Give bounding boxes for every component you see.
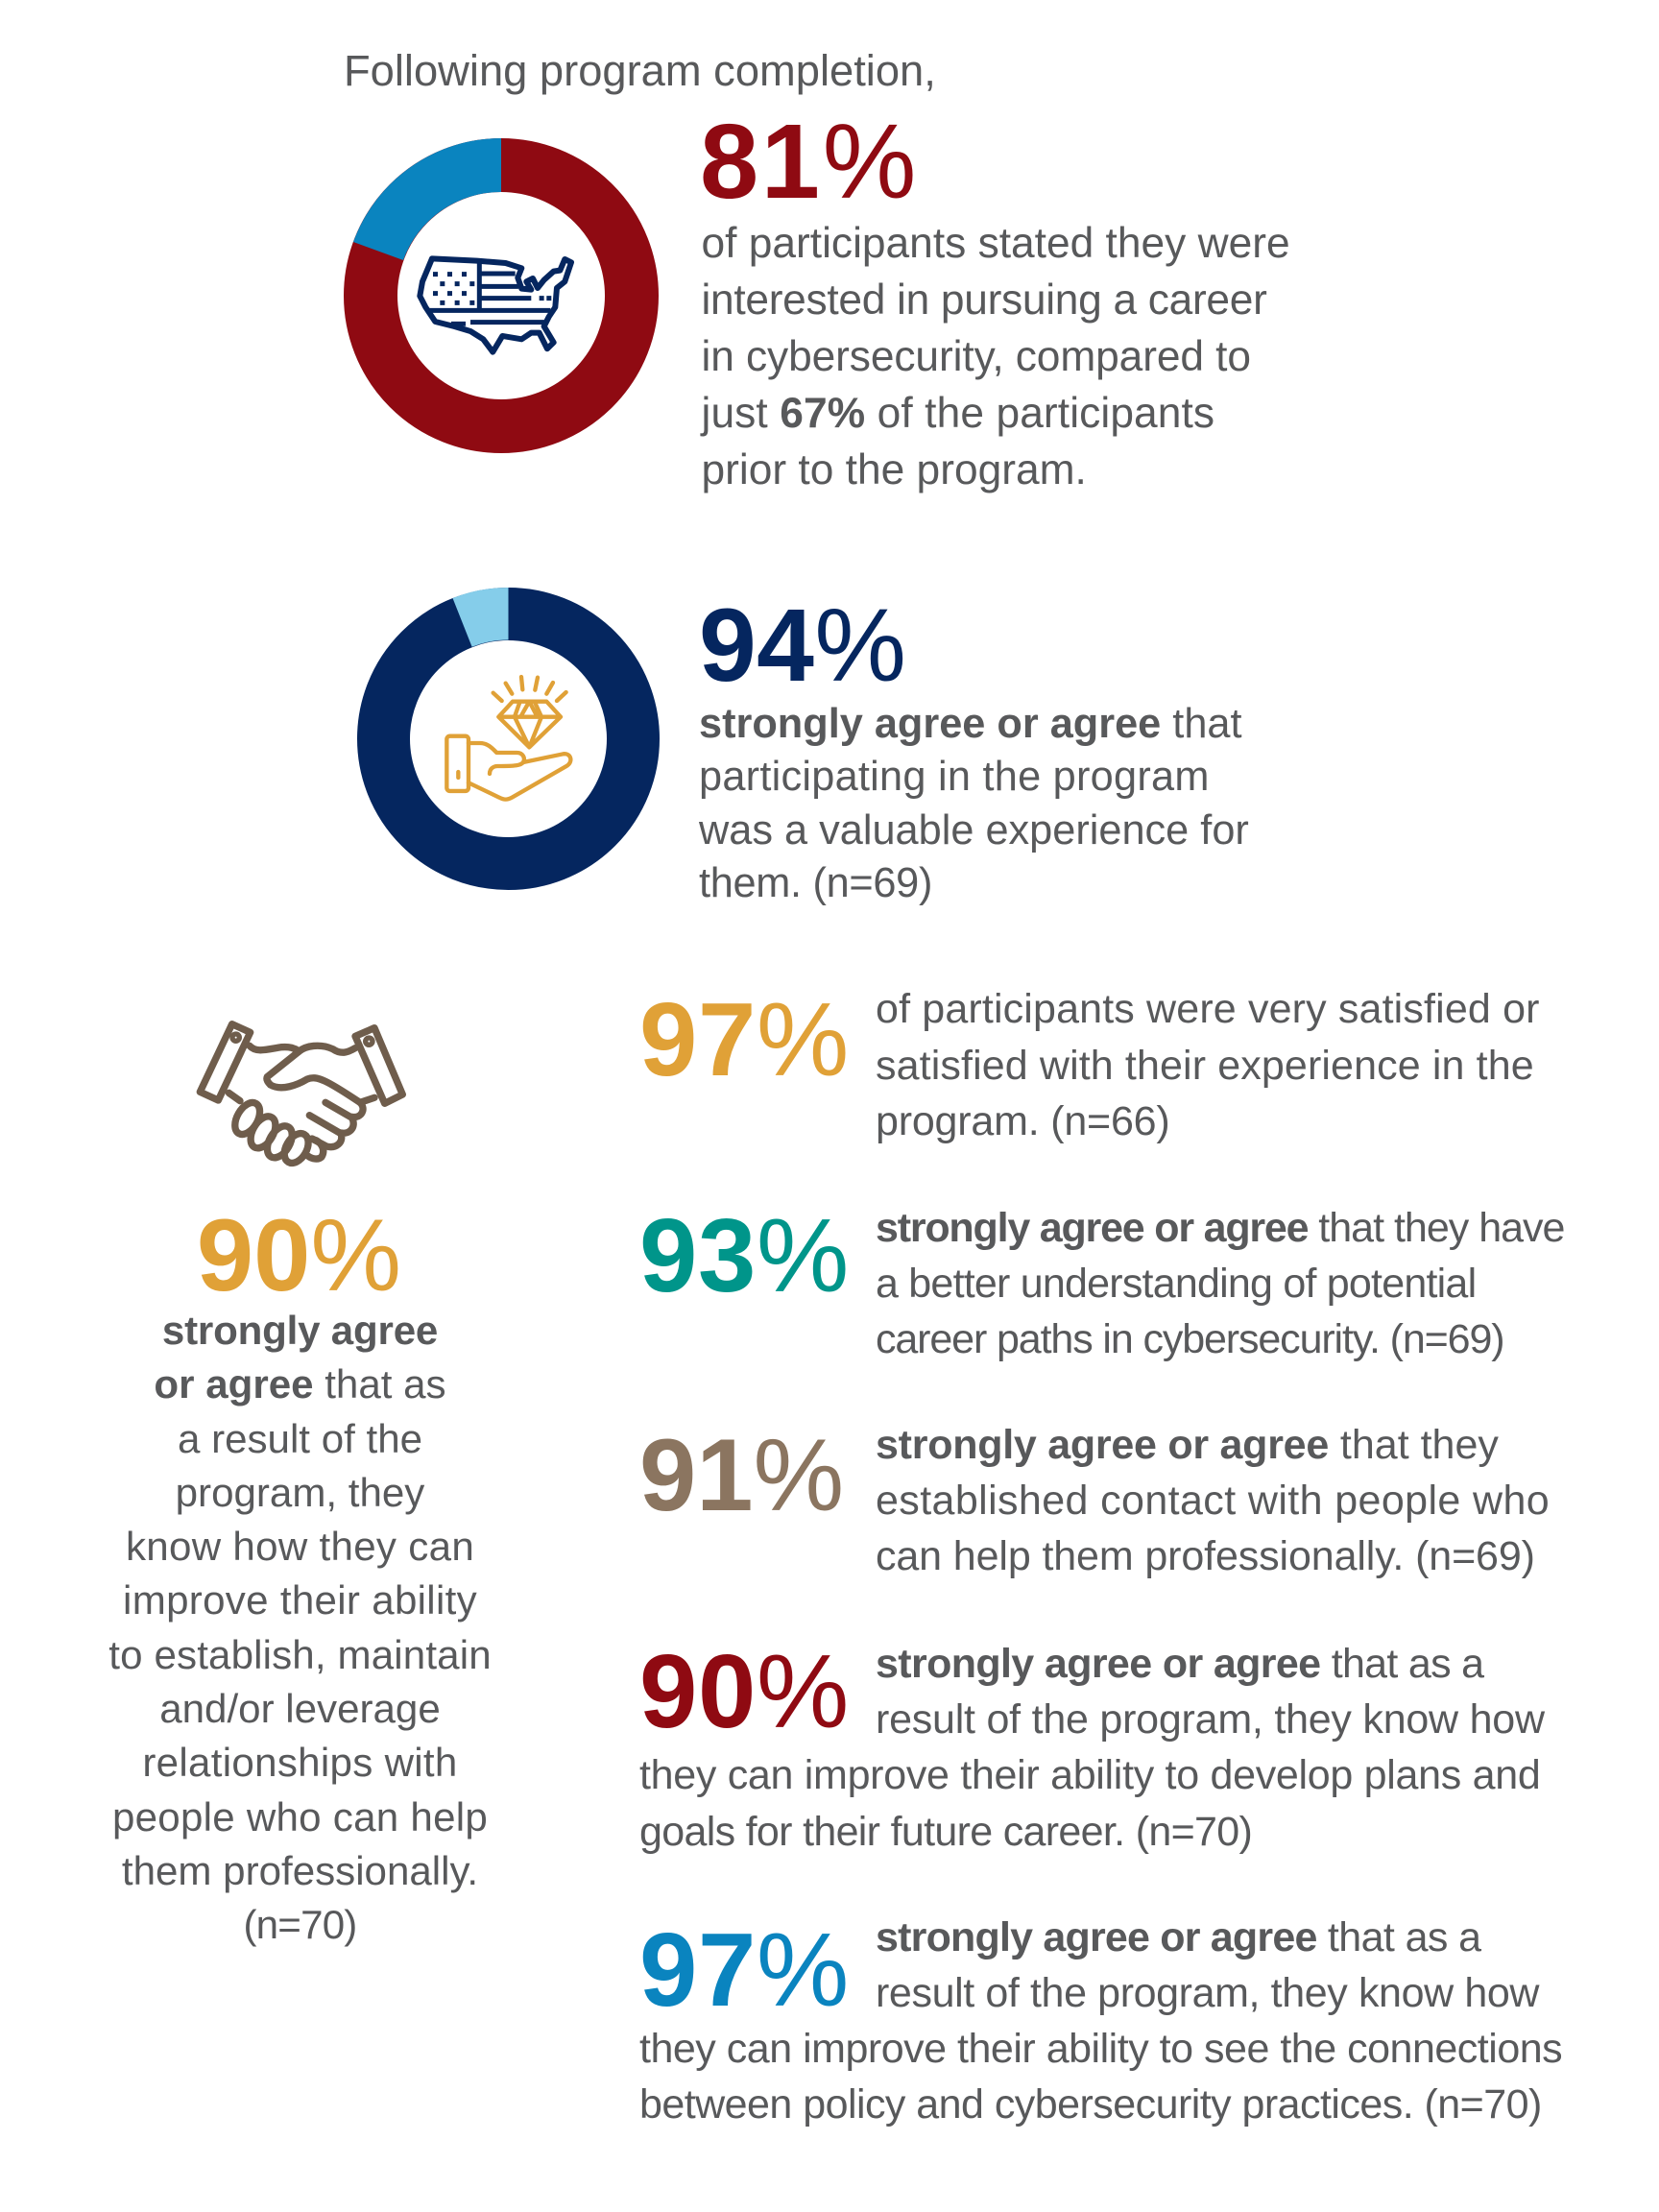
stat: 91%: 91% [639,1418,844,1532]
text: 81% description: just 67% of the participants [701,390,1214,437]
text: 97% policy description: result of the program, they know how [876,1970,1539,2016]
text: 81% description: of participants stated they were [701,220,1290,267]
text: 90% relationships description: a result of the [178,1416,422,1461]
panel: 93% career paths [639,1197,1564,1362]
icon: handshake [196,1021,406,1167]
text: 90% relationships description: relationships with [142,1740,458,1785]
text: 81% description: interested in pursuing a career [701,276,1267,324]
stat: 90% red: 90% [639,1633,850,1749]
text: 91% description: established contact with people who [876,1478,1550,1524]
text: 90% career plans description: goals for their future career. (n=70) [639,1809,1252,1855]
text: 81% description [700,220,1290,493]
text: 97% policy description: strongly agree or agree that as a [876,1914,1480,1960]
text: 97% policy description [639,1914,1562,2128]
panel: 97% satisfied [639,981,1540,1144]
text: 91% description [876,1421,1550,1579]
text: 94% description: participating in the program [699,754,1210,800]
text: 97% satisfied description: of participants were very satisfied or [876,986,1540,1032]
panel: 97% policy connections [639,1911,1562,2128]
panel: 94% valuable experience [357,588,1249,906]
text: 91% description: can help them professionally. (n=69) [876,1533,1535,1579]
text: 90% relationships description: them professionally. [122,1848,478,1893]
text: 90% career plans description [639,1641,1546,1855]
panel: 91% professional contacts [639,1418,1550,1579]
panel: 81% career interest [344,103,1290,493]
text: 81% description: prior to the program. [701,446,1087,493]
text: 90% relationships description: people who can help [112,1794,488,1839]
stat: 81%: 81% [700,103,919,221]
text: 93% description: strongly agree or agree that they have [876,1205,1564,1251]
stat: 90% gold: 90% [197,1198,401,1312]
text: 90% relationships description: or agree that as [154,1361,446,1407]
text: 90% relationships description: (n=70) [243,1902,357,1947]
stat: 94%: 94% [699,588,906,703]
stat: 97% blue: 97% [639,1911,850,2028]
stat: 93%: 93% [639,1197,850,1313]
text: 90% relationships description: program, they [176,1470,424,1515]
text: 94% description: them. (n=69) [699,860,932,906]
text: 90% relationships description: know how they can [126,1524,474,1569]
text: 94% description: strongly agree or agree that [699,701,1242,747]
text: 90% relationships description: improve their ability [123,1577,477,1623]
donut chart: 94% [384,588,634,864]
text: 93% description: a better understanding of potential [876,1261,1476,1307]
text: 97% policy description: between policy and cybersecurity practices. (n=70) [639,2081,1542,2128]
intro heading: Following program completion, [344,46,936,94]
donut chart: 81% [353,138,632,426]
text: 90% relationships description: strongly agree [162,1308,438,1353]
icon: US map flag [420,258,571,352]
stat: 97% gold: 97% [639,981,850,1097]
icon: hand holding diamond [446,677,570,800]
text: 90% career plans description: they can improve their ability to develop plans and [639,1752,1540,1798]
text: 97% satisfied description: program. (n=66) [876,1098,1170,1144]
text: 93% description [876,1205,1564,1362]
text: 90% relationships description [108,1308,492,1947]
panel: 90% career plans [639,1633,1546,1855]
text: 90% relationships description: and/or leverage [159,1686,441,1731]
text: 94% description [699,701,1249,906]
text: 81% description: in cybersecurity, compared to [701,333,1251,380]
text: 90% career plans description: result of the program, they know how [876,1696,1545,1743]
panel: 90% relationships [108,1021,492,1947]
text: 91% description: strongly agree or agree that they [876,1421,1499,1467]
text: 94% description: was a valuable experience for [699,807,1249,854]
text: 90% relationships description: to establish, maintain [108,1632,492,1677]
text: 97% policy description: they can improve their ability to see the connections [639,2026,1562,2072]
text: 90% career plans description: strongly agree or agree that as a [876,1641,1483,1687]
text: 97% satisfied description: satisfied with their experience in the [876,1043,1534,1089]
text: 97% satisfied description [876,986,1540,1144]
text: 93% description: career paths in cybersecurity. (n=69) [876,1316,1503,1362]
